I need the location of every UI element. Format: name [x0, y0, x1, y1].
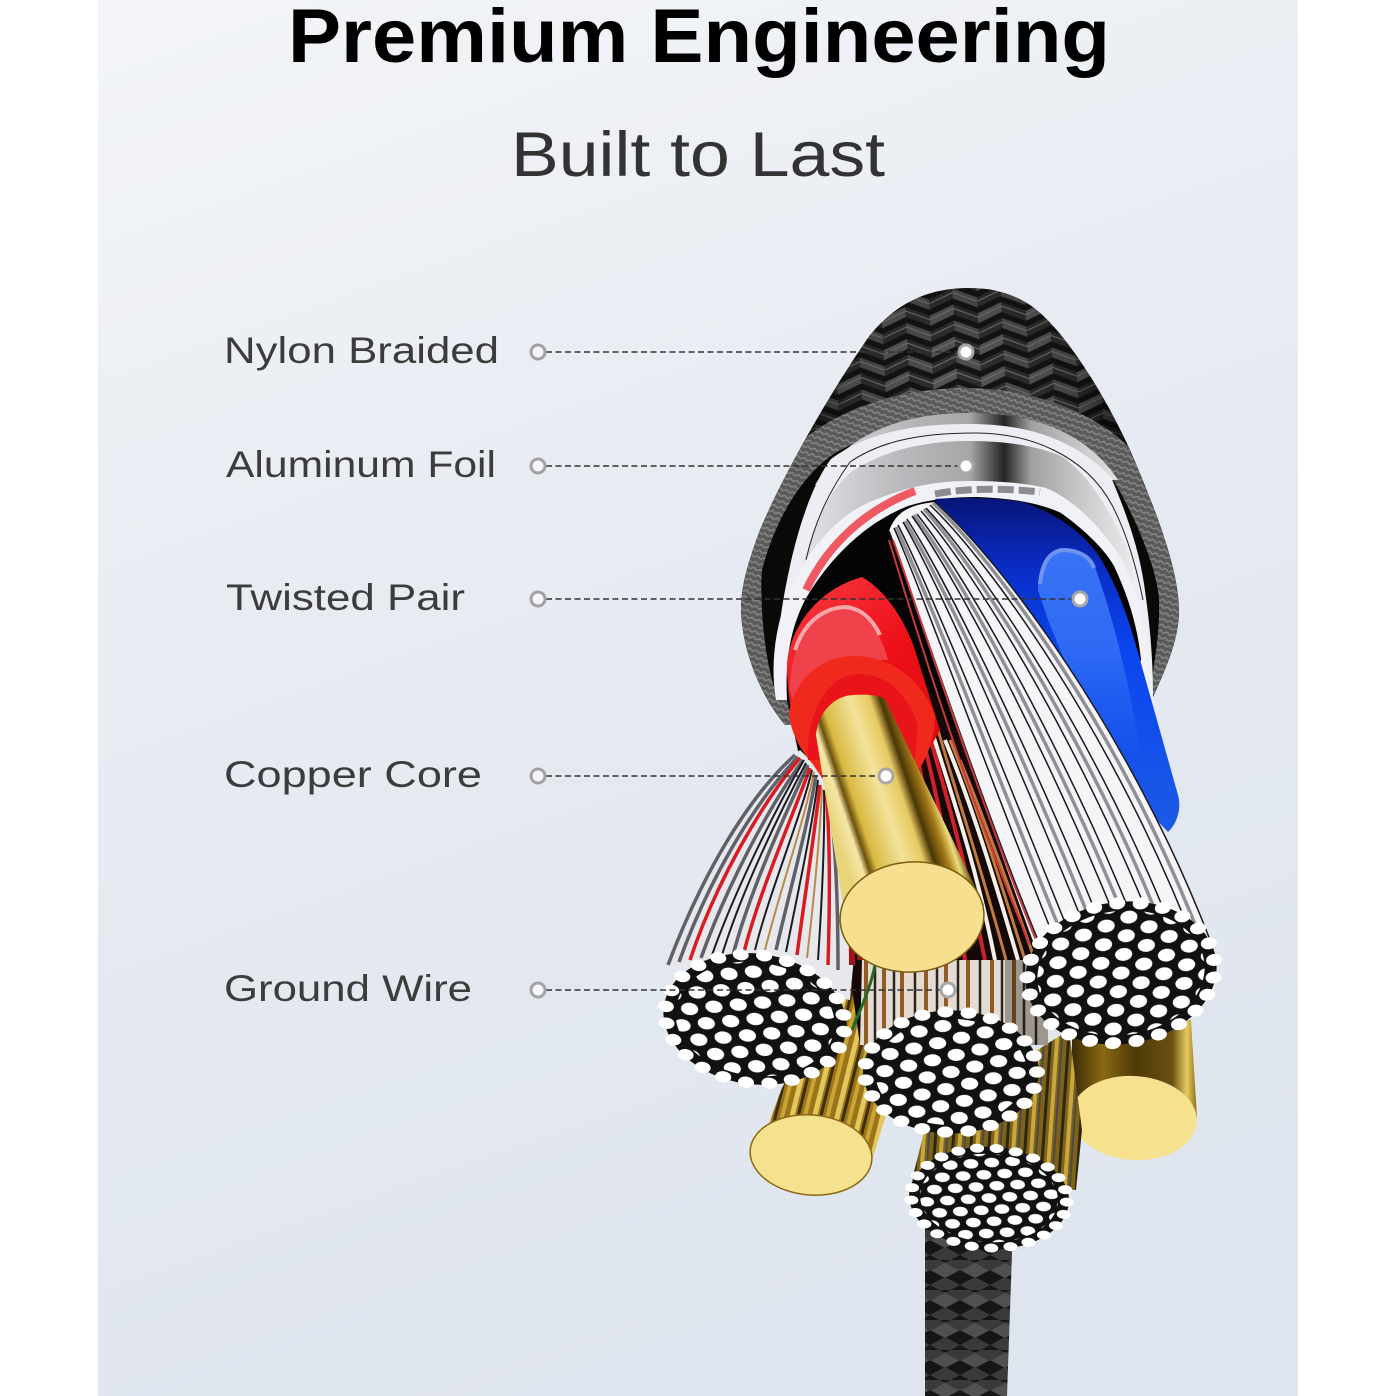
lower right gold core	[1068, 1020, 1200, 1164]
label: Nylon Braided	[224, 330, 973, 371]
cable illustration	[655, 288, 1226, 1396]
label: Twisted Pair	[226, 577, 1087, 618]
strand bundle: bottom	[906, 1143, 1072, 1253]
label: Copper Core: Copper Core	[224, 754, 482, 795]
silver strand fan to right bundle	[889, 502, 1212, 960]
outer nylon braid	[741, 288, 1179, 725]
strand bundle: right	[1016, 889, 1226, 1057]
left fan of strands	[665, 750, 875, 1030]
label: Ground Wire	[224, 968, 955, 1009]
bottom braided cable	[925, 1225, 1013, 1396]
inner cavity	[787, 497, 1141, 760]
label: Aluminum Foil: Aluminum Foil	[226, 444, 496, 485]
inner insulation ring	[774, 481, 1153, 700]
central strands behind gold core	[835, 650, 1048, 1045]
chrome reflection on ring	[935, 489, 1040, 494]
blue insulated wire	[935, 498, 1179, 832]
braid cut rim	[741, 388, 1179, 725]
label: Twisted Pair: Twisted Pair	[226, 577, 465, 618]
black gap	[761, 428, 1159, 690]
strand bundle: left	[655, 942, 855, 1096]
red insulated wire	[787, 577, 940, 790]
label: Copper Core	[224, 754, 893, 795]
label: Ground Wire: Ground Wire	[224, 968, 472, 1009]
lower left gold core	[747, 960, 885, 1200]
pink reflection on ring	[806, 491, 915, 590]
aluminum foil layers	[776, 413, 1153, 700]
bottom conductor sleeve strands	[912, 1030, 1082, 1190]
label: Aluminum Foil	[226, 444, 973, 485]
large gold copper core	[816, 695, 988, 977]
subtitle: Built to Last	[511, 120, 886, 190]
label: Nylon Braided: Nylon Braided	[224, 330, 499, 371]
strand bundle: center	[863, 1010, 1039, 1134]
